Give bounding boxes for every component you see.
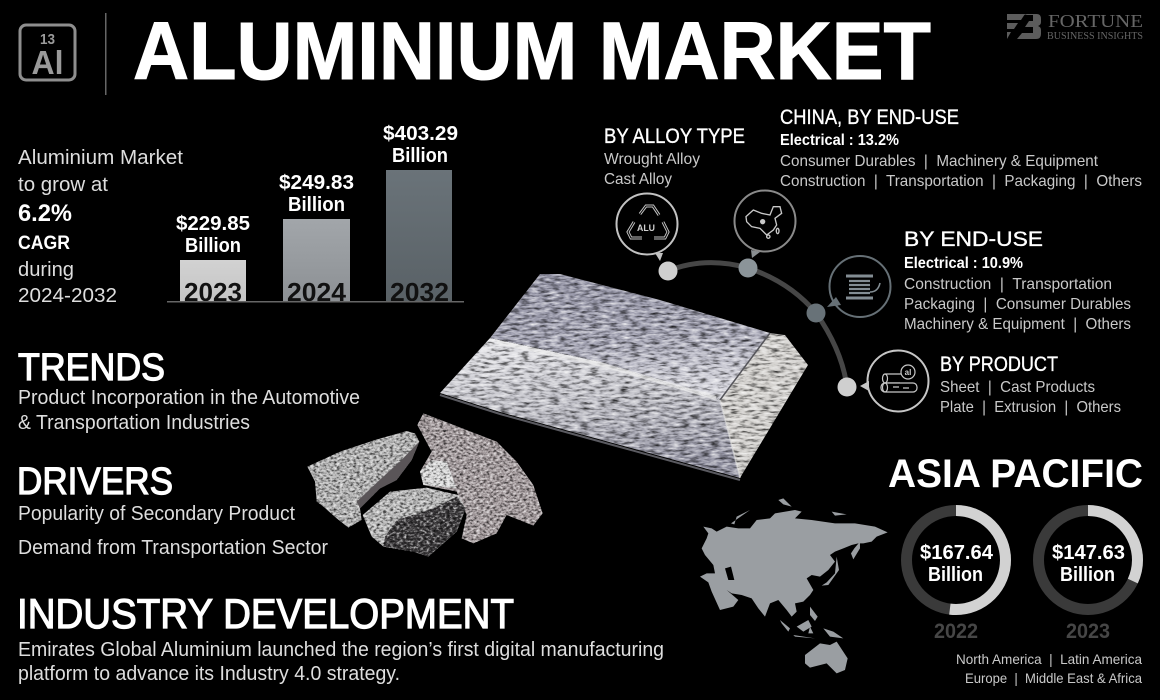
bar chart: market size xyxy=(167,123,464,307)
bar 2023: 2023 xyxy=(184,277,242,307)
donut: 2022: $167.64 xyxy=(920,541,994,564)
text: CAGR summary: CAGR xyxy=(18,233,70,254)
image: aluminium rocks xyxy=(307,413,543,557)
bar 2032: Billion xyxy=(392,145,448,167)
bar 2024: $249.83 xyxy=(279,172,354,194)
segment: by end-use: Packaging | Consumer Durables xyxy=(904,296,1131,313)
segment: by end-use: Construction | Transportation xyxy=(904,276,1112,293)
segment: China by end-use: Construction | Transportation | Packaging | Others xyxy=(780,173,1142,190)
text: CAGR summary: 6.2% xyxy=(18,200,72,227)
segment: by product: Sheet | Cast Products xyxy=(940,379,1095,396)
logo: Fortune Business Insights xyxy=(1007,11,1143,42)
segment: China by end-use: CHINA, BY END-USE xyxy=(780,106,959,129)
text: CAGR summary xyxy=(18,147,183,307)
icon: China map xyxy=(734,190,796,258)
bar 2023: Billion xyxy=(185,235,241,257)
donut: 2022 xyxy=(906,510,1006,643)
segmentation arc xyxy=(668,263,847,387)
panel: trends: Product Incorporation in the Automotive xyxy=(18,387,360,409)
panel: industry development xyxy=(17,590,664,685)
panel: trends: & Transportation Industries xyxy=(18,412,250,434)
segment: by product xyxy=(838,350,1121,416)
image: aluminium ingot xyxy=(440,274,808,480)
bar 2023 xyxy=(176,213,250,307)
donut: 2023: Billion xyxy=(1060,563,1115,586)
segment: by end-use: Electrical : 10.9% xyxy=(904,255,1023,272)
title: ALUMINIUM MARKET xyxy=(133,6,931,97)
heading: Asia Pacific: ASIA PACIFIC xyxy=(888,452,1143,496)
icon: recycling ALU: ALU xyxy=(637,223,655,234)
segment: by end-use: BY END-USE xyxy=(904,228,1043,251)
segment: by alloy type: Cast Alloy xyxy=(604,171,672,188)
donut: 2022: 2022 xyxy=(934,620,978,643)
segment: China by end-use: Consumer Durables | Machinery & Equipment xyxy=(780,153,1099,170)
text: other regions xyxy=(956,651,1142,686)
donut: 2023 xyxy=(1038,510,1138,643)
segment: by end-use xyxy=(806,228,1131,333)
panel: industry development: Emirates Global Aluminium launched the region’s first digital manufacturing xyxy=(18,639,664,661)
segment: by end-use: Machinery & Equipment | Others xyxy=(904,316,1131,333)
text: other regions: Europe | Middle East & Africa xyxy=(965,670,1142,686)
icon: aluminium element symbol: Al xyxy=(32,44,64,81)
panel: drivers: Demand from Transportation Sector xyxy=(18,537,328,559)
text: CAGR summary: to grow at xyxy=(18,174,108,196)
bar 2024: 2024 xyxy=(287,277,347,307)
bar 2024: Billion xyxy=(288,194,345,216)
donut: 2023: 2023 xyxy=(1066,620,1110,643)
panel: drivers: DRIVERS xyxy=(17,461,173,503)
panel: industry development: INDUSTRY DEVELOPMENT xyxy=(17,590,514,637)
segment: by alloy type xyxy=(604,125,745,280)
bar 2032: 2032 xyxy=(390,277,449,307)
bar 2032 xyxy=(383,123,458,307)
panel: drivers xyxy=(17,461,328,559)
segment: by alloy type: Wrought Alloy xyxy=(604,151,700,168)
map: Asia Pacific xyxy=(700,498,888,673)
text: CAGR summary: during xyxy=(18,259,74,281)
icon: aluminium products: al xyxy=(905,368,911,377)
icon: recycling ALU xyxy=(616,194,678,261)
segment: China by end-use: Electrical : 13.2% xyxy=(780,132,899,149)
donut: 2022: Billion xyxy=(928,563,983,586)
segment: by product: BY PRODUCT xyxy=(940,353,1058,376)
logo: Fortune Business Insights: BUSINESS INSIGHTS xyxy=(1047,31,1143,42)
logo: Fortune Business Insights: FORTUNE xyxy=(1048,11,1143,31)
text: CAGR summary: Aluminium Market xyxy=(18,147,183,169)
panel: trends: TRENDS xyxy=(18,347,165,389)
icon: aluminium element symbol xyxy=(20,25,75,81)
icon: cable spool xyxy=(827,256,890,317)
panel: trends xyxy=(18,347,360,434)
donut: 2023: $147.63 xyxy=(1052,541,1125,564)
panel: drivers: Popularity of Secondary Product xyxy=(18,503,295,525)
icon: aluminium products xyxy=(860,350,928,412)
text: other regions: North America | Latin America xyxy=(956,651,1142,667)
panel: industry development: platform to advance its Industry 4.0 strategy. xyxy=(18,663,400,685)
text: CAGR summary: 2024-2032 xyxy=(18,285,117,307)
bar 2024 xyxy=(279,172,354,307)
bar 2032: $403.29 xyxy=(383,123,458,145)
segment: by alloy type: BY ALLOY TYPE xyxy=(604,125,745,148)
segment: China by end-use xyxy=(734,106,1142,278)
icon: aluminium element symbol: 13 xyxy=(40,31,55,48)
bar 2023: $229.85 xyxy=(176,213,250,235)
segment: by product: Plate | Extrusion | Others xyxy=(940,399,1121,416)
